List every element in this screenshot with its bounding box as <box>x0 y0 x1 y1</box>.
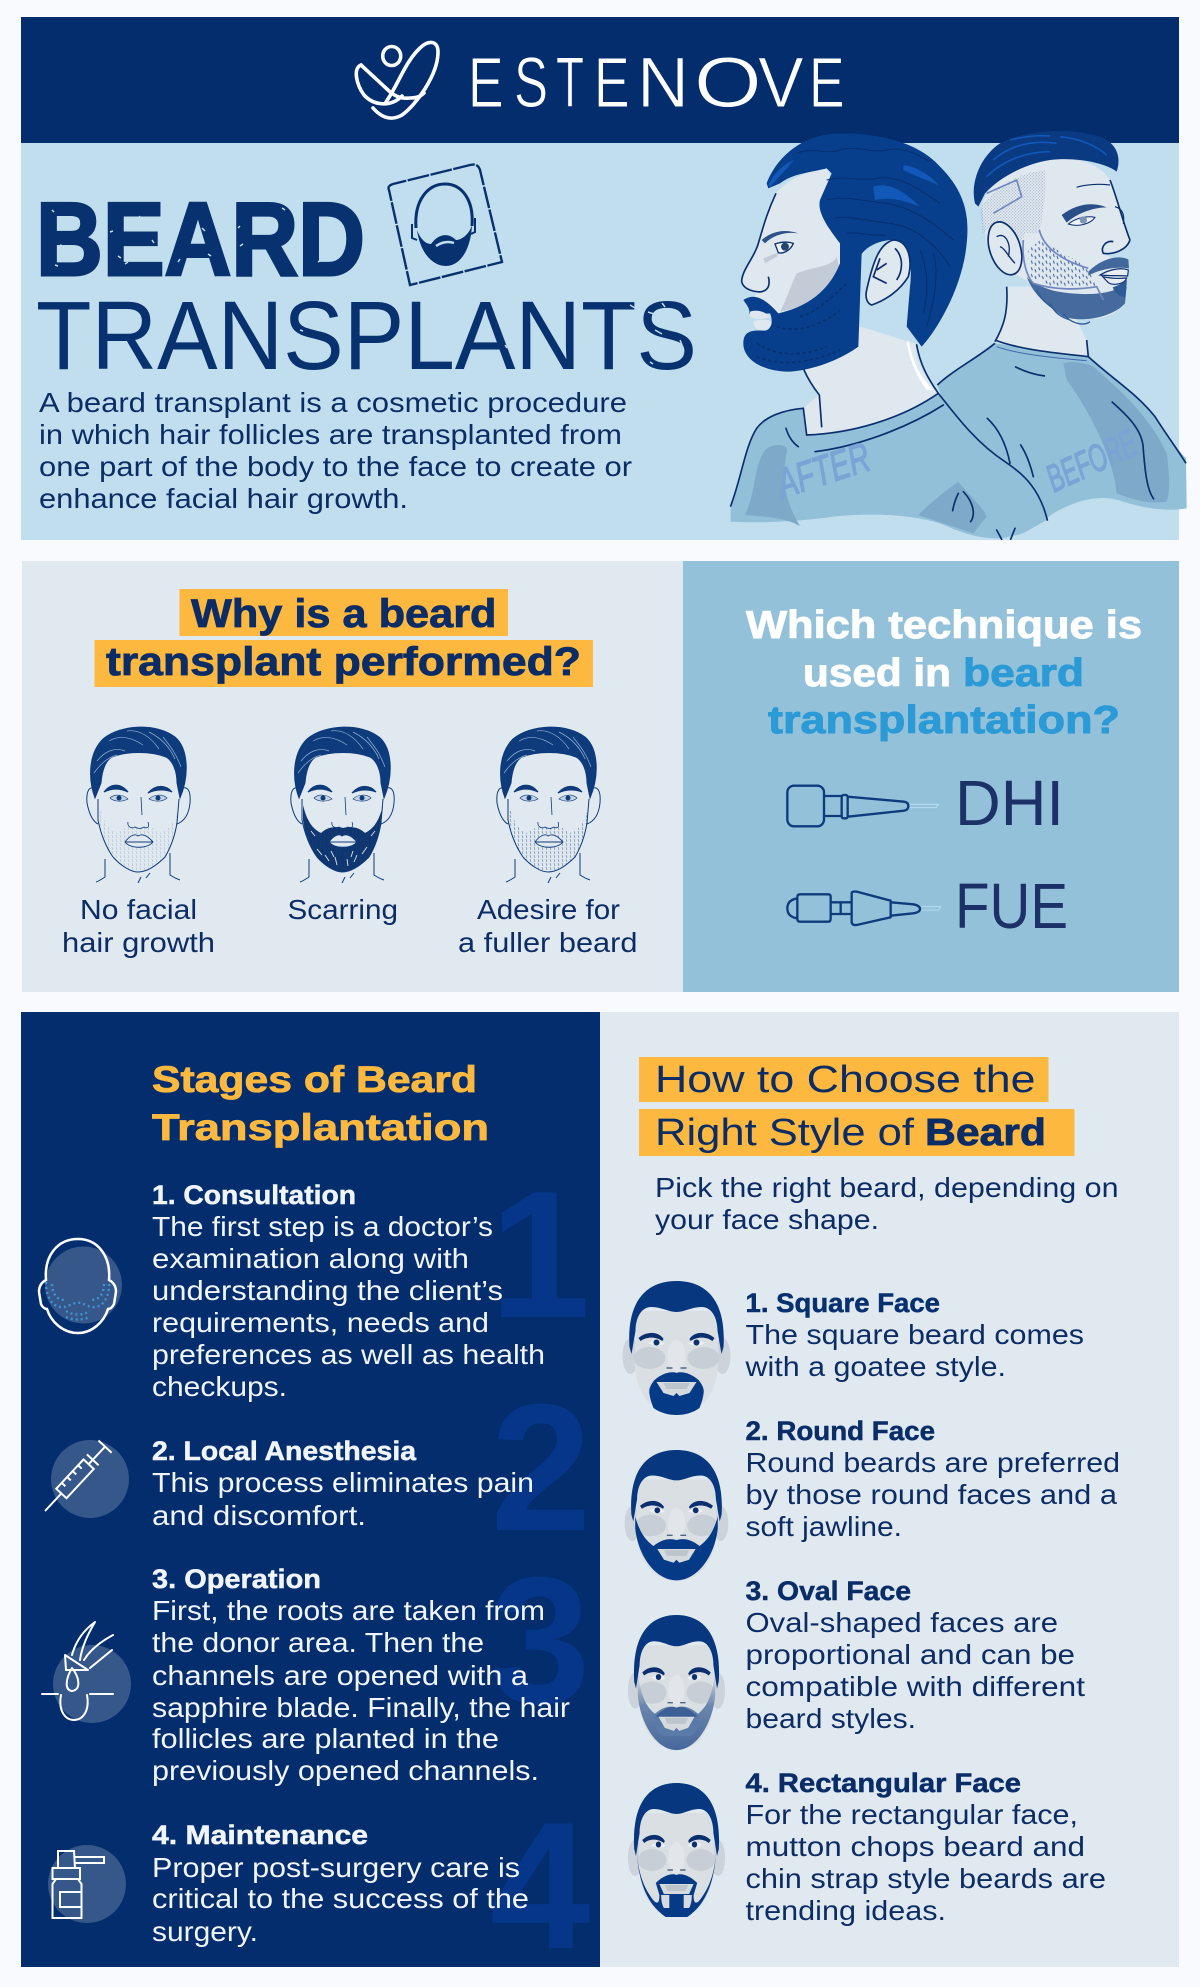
heading: why: transplant performed? <box>106 640 581 684</box>
heading: which technique <box>746 604 1142 742</box>
icon: spray bottle <box>48 1845 126 1923</box>
ghost numeral 1: 1 <box>490 1154 590 1356</box>
text block: intro: one part of the body to the face to create or <box>39 451 632 482</box>
heading: which technique: beard <box>963 652 1084 695</box>
panel: how to choose the right style of beard <box>600 1012 1179 1967</box>
panel: why is a beard transplant performed <box>22 561 683 992</box>
text: round face: 2. Round Face <box>746 1416 935 1446</box>
label: FUE: FUE <box>955 870 1068 942</box>
text block: intro: enhance facial hair growth. <box>39 483 408 514</box>
stage 1: consultation text <box>152 1180 545 1402</box>
stage 2: local anesthesia text: 2. Local Anesthesia <box>152 1436 416 1466</box>
logo wordmark: S <box>514 44 548 123</box>
text: rectangular face <box>746 1768 1106 1926</box>
text: oval face <box>746 1576 1085 1734</box>
caption: a desire for a fuller beard: Adesire for <box>477 894 620 925</box>
stage 1: consultation text: preferences as well as health <box>152 1339 545 1370</box>
icon: oval face with light beard <box>628 1615 725 1750</box>
text: round face: Round beards are preferred <box>746 1447 1120 1478</box>
stage 4: maintenance text: Proper post-surgery care is <box>152 1852 520 1883</box>
stage 1: consultation text: examination along with <box>152 1243 469 1274</box>
icon: face with no facial hair <box>87 727 190 883</box>
stage 4: maintenance text <box>152 1820 529 1947</box>
illustration: after man <box>731 133 1047 539</box>
heading: which technique: used in <box>803 652 951 695</box>
stage 3: operation text: 3. Operation <box>152 1564 321 1594</box>
text: oval face: 3. Oval Face <box>746 1576 911 1606</box>
icon: DHI pen <box>787 786 938 826</box>
title <box>36 182 697 390</box>
text: round face <box>746 1416 1120 1542</box>
panel: stages of beard transplantation <box>21 1012 600 1987</box>
stage 1: consultation text: checkups. <box>152 1371 287 1402</box>
text block: pick the right beard: Pick the right beard, depending on <box>655 1172 1118 1203</box>
ghost numeral 3: 3 <box>490 1540 590 1742</box>
stage 1: consultation text: requirements, needs and <box>152 1307 489 1338</box>
illustration: before and after men <box>731 131 1187 539</box>
heading: which technique: transplantation? <box>768 699 1120 742</box>
heading: how to choose <box>639 1057 1074 1156</box>
text: rectangular face: chin strap style beards are <box>746 1863 1106 1894</box>
text: rectangular face: trending ideas. <box>746 1895 946 1926</box>
text: square face: The square beard comes <box>746 1319 1084 1350</box>
stage 4: maintenance text: 4. Maintenance <box>152 1820 368 1850</box>
stage 3: operation text: sapphire blade. Finally, the hair <box>152 1692 570 1723</box>
heading: why: Why is a beard <box>191 592 496 636</box>
stage 2: local anesthesia text: and discomfort. <box>152 1500 366 1531</box>
stage 3: operation text <box>152 1564 570 1786</box>
caption: a desire for a fuller beard: a fuller beard <box>458 927 638 958</box>
title: TRANSPLANTS <box>36 281 697 390</box>
stage 4: maintenance text: critical to the success of the <box>152 1883 529 1914</box>
icon: beard stamp <box>388 165 502 285</box>
panel: brand header <box>21 17 1179 143</box>
icon: face wanting a fuller beard <box>497 727 600 883</box>
text block: intro <box>39 387 632 514</box>
text: rectangular face: mutton chops beard and <box>746 1831 1085 1862</box>
illustration: before man: BEFORE <box>1040 422 1144 501</box>
heading: which technique: Which technique is <box>746 604 1142 647</box>
logo wordmark: E <box>809 44 845 123</box>
text: square face: with a goatee style. <box>744 1351 1006 1382</box>
logo wordmark: V <box>758 44 804 123</box>
heading: why <box>94 589 593 687</box>
stage 3: operation text: follicles are planted in the <box>152 1723 499 1754</box>
ghost numeral 2: 2 <box>491 1367 591 1569</box>
heading: stages: Transplantation <box>152 1107 489 1148</box>
logo wordmark: E <box>594 44 630 123</box>
label: DHI: DHI <box>955 767 1064 839</box>
stage 2: local anesthesia text <box>152 1436 534 1531</box>
text: oval face: beard styles. <box>746 1703 916 1734</box>
logo wordmark: O <box>694 44 762 123</box>
icon: round face with full beard <box>625 1450 728 1581</box>
icon: head with beard dots <box>39 1239 122 1333</box>
text: rectangular face: For the rectangular face, <box>746 1799 1078 1830</box>
stage 3: operation text: First, the roots are taken from <box>152 1595 545 1626</box>
heading: how to choose: How to Choose the <box>655 1059 1036 1101</box>
icon: follicle implant <box>42 1622 131 1723</box>
stage 4: maintenance text: surgery. <box>152 1916 258 1947</box>
caption: no facial hair growth: No facial <box>80 894 197 925</box>
caption: no facial hair growth: hair growth <box>62 927 215 958</box>
title: BEARD <box>36 182 365 298</box>
illustration: before man <box>937 131 1187 535</box>
icon: Estenove logo mark <box>356 42 438 118</box>
logo wordmark: T <box>556 44 584 123</box>
text: round face: by those round faces and a <box>746 1479 1117 1510</box>
text block: intro: A beard transplant is a cosmetic procedure <box>39 387 627 418</box>
logo wordmark: E <box>468 44 504 123</box>
heading: how to choose: Right Style of <box>655 1112 915 1154</box>
stage 3: operation text: the donor area. Then the <box>152 1627 484 1658</box>
heading: stages: Stages of Beard <box>152 1059 477 1100</box>
caption: no facial hair growth <box>62 894 215 958</box>
text: oval face: Oval-shaped faces are <box>746 1607 1058 1638</box>
caption: scarring: Scarring <box>288 894 398 925</box>
icon: rectangular face with chin strap <box>628 1783 725 1917</box>
stage 1: consultation text: The first step is a doctor’s <box>152 1211 493 1242</box>
stage 1: consultation text: understanding the client’s <box>152 1275 503 1306</box>
text: rectangular face: 4. Rectangular Face <box>746 1768 1021 1798</box>
text: square face <box>744 1288 1084 1382</box>
icon: syringe <box>38 1440 129 1518</box>
heading: stages <box>152 1059 489 1148</box>
heading: how to choose: Beard <box>925 1112 1046 1154</box>
text block: pick the right beard <box>655 1172 1118 1235</box>
icon: square face with goatee <box>622 1281 730 1415</box>
caption: a desire for a fuller beard <box>458 894 638 958</box>
text block: intro: in which hair follicles are transplanted from <box>39 419 622 450</box>
text: oval face: proportional and can be <box>746 1639 1075 1670</box>
illustration: after man: AFTER <box>769 433 876 508</box>
stage 1: consultation text: 1. Consultation <box>152 1180 356 1210</box>
stage 2: local anesthesia text: This process eliminates pain <box>152 1467 534 1498</box>
text: round face: soft jawline. <box>746 1511 902 1542</box>
panel: which technique <box>683 561 1179 992</box>
text block: pick the right beard: your face shape. <box>655 1204 879 1235</box>
panel: hero background <box>21 143 1179 540</box>
icon: FUE punch <box>787 892 941 925</box>
logo wordmark: N <box>637 44 689 123</box>
stage 3: operation text: channels are opened with a <box>152 1660 528 1691</box>
ghost numeral 4: 4 <box>490 1785 590 1987</box>
text: square face: 1. Square Face <box>746 1288 940 1318</box>
stage 3: operation text: previously opened channels. <box>152 1755 539 1786</box>
text: oval face: compatible with different <box>746 1671 1085 1702</box>
icon: face with scarring and full beard <box>291 727 394 883</box>
